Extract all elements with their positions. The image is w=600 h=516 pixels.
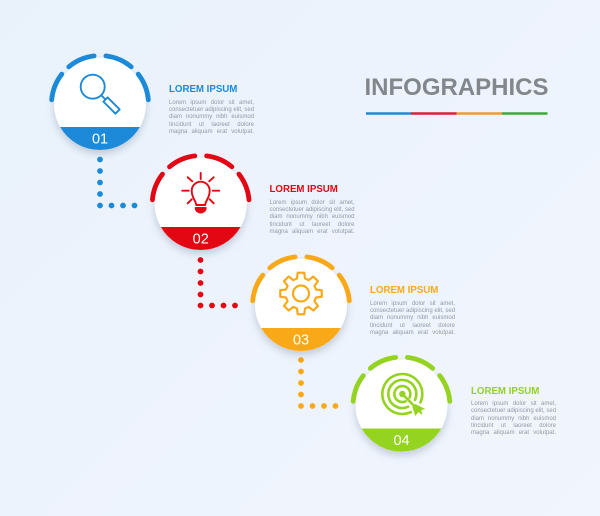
text block: step 2 [270, 184, 355, 235]
text block: step 3: tincidunt ut laoreet dolore [370, 323, 455, 329]
text block: step 3 [370, 285, 455, 336]
text block: step 3: diam nonummy nibh euismod [370, 315, 455, 321]
text block: step 3: consectetuer adipiscing elit, sed [370, 308, 455, 314]
icon: light bulb [182, 173, 219, 212]
text block: step 1: tincidunt ut laoreet dolore [169, 122, 254, 128]
text block: step 1: Lorem ipsum dolor sit amet, [169, 100, 254, 106]
connector: blue dotted line [97, 157, 137, 208]
connector: orange dotted line [298, 357, 338, 409]
text block: step 1 [169, 84, 254, 135]
text block: step 4: consectetuer adipiscing elit, sed [471, 408, 556, 414]
icon: gear [280, 273, 322, 314]
step 3 circle [253, 257, 349, 351]
text block: step 2: diam nonummy nibh euismod [270, 214, 354, 220]
step 2 circle [152, 156, 249, 250]
text block: step 3: LOREM IPSUM [370, 285, 438, 296]
text block: step 3: Lorem ipsum dolor sit amet, [370, 300, 455, 306]
icon: target with arrow [382, 374, 425, 416]
step 1 circle [52, 56, 148, 150]
text block: step 2: consectetuer adipiscing elit, sed [270, 207, 355, 213]
text block: step 4: LOREM IPSUM [471, 386, 539, 396]
text block: step 1: diam nonummy nibh euismod [169, 114, 254, 120]
text block: step 2: tincidunt ut laoreet dolore [270, 222, 354, 228]
text block: step 4: magna aliquam erat volutpat. [471, 430, 556, 436]
number 04: 04 [393, 433, 410, 449]
text block: step 4: Lorem ipsum dolor sit amet, [471, 401, 556, 407]
title: INFOGRAPHICS [364, 74, 549, 101]
text block: step 1: consectetuer adipiscing elit, sed [169, 107, 254, 113]
text block: step 2: Lorem ipsum dolor sit amet, [270, 200, 354, 206]
connector: red dotted line [198, 257, 238, 308]
text block: step 1: LOREM IPSUM [169, 84, 237, 95]
text block: step 4: tincidunt ut laoreet dolore [471, 423, 556, 429]
text block: step 4 [471, 386, 556, 436]
text block: step 2: magna aliquam erat volutpat. [270, 229, 354, 235]
text block: step 1: magna aliquam erat volutpat. [169, 129, 254, 135]
number 01: 01 [92, 132, 108, 148]
icon: magnifier [81, 75, 120, 114]
text block: step 2: LOREM IPSUM [270, 184, 338, 195]
text block: step 4: diam nonummy nibh euismod [471, 416, 556, 422]
number 02: 02 [193, 232, 209, 248]
text block: step 3: magna aliquam erat volutpat. [370, 330, 455, 336]
step 4 circle [353, 357, 450, 452]
number 03: 03 [293, 332, 309, 348]
title underline [366, 112, 548, 115]
